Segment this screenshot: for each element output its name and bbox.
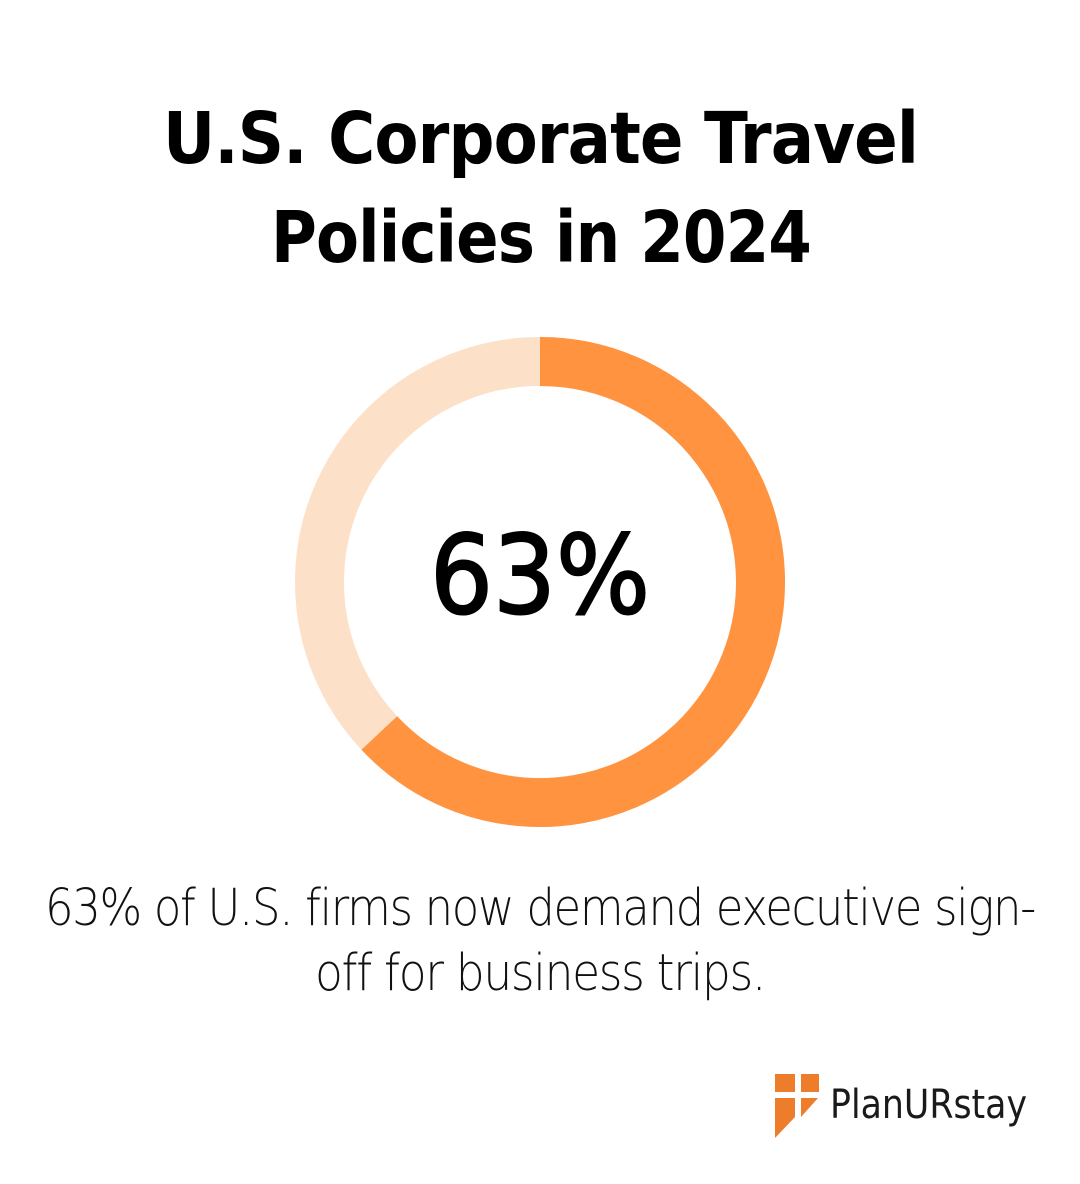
title: Policies in 2024 — [271, 196, 811, 279]
donut chart: 63% — [320, 362, 760, 802]
caption: off for business trips. — [315, 944, 765, 1003]
caption — [45, 879, 1035, 1003]
logo icon — [775, 1074, 819, 1138]
donut value: 63% — [430, 512, 650, 639]
logo: PlanURstay — [775, 1074, 1027, 1138]
title — [163, 97, 918, 279]
title: U.S. Corporate Travel — [163, 97, 918, 180]
logo wordmark: PlanURstay — [830, 1082, 1027, 1128]
